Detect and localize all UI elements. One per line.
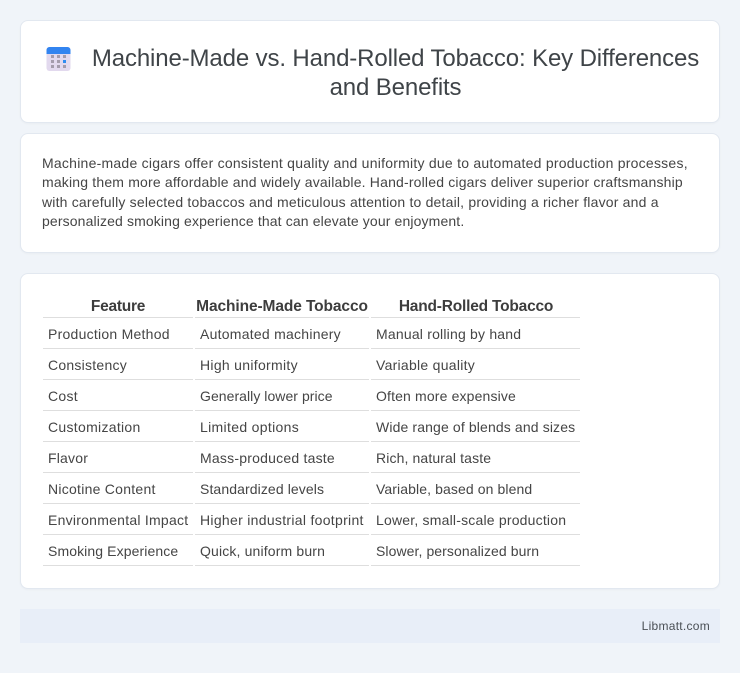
icon: calendar grid (46, 47, 70, 71)
row: production method: Production Method (48, 326, 170, 342)
footer bar (20, 609, 720, 643)
row: cost (48, 388, 516, 404)
row: consistency (48, 357, 475, 373)
row: consistency: High uniformity (200, 357, 298, 373)
row: environmental impact: Environmental Impact (48, 512, 188, 528)
row: cost: Cost (48, 388, 78, 404)
panel: title card (20, 20, 720, 123)
summary paragraph: Machine-made cigars offer consistent quality and uniformity due to automated production processes, (42, 154, 688, 170)
summary paragraph: with carefully selected tobaccos and meticulous attention to detail, providing a richer flavor and a (42, 194, 659, 210)
comparison table (43, 298, 580, 566)
row: consistency: Variable quality (376, 357, 475, 373)
summary paragraph: making them more affordable and widely available. Hand-rolled cigars deliver superior craftsmanship (42, 174, 683, 190)
footer credit: Libmatt.com (642, 619, 710, 633)
row: flavor: Flavor (48, 450, 88, 466)
row: production method: Automated machinery (200, 326, 341, 342)
title: Machine-Made vs. Hand-Rolled Tobacco: Key Differences and Benefits (92, 45, 699, 101)
table header: Feature (91, 298, 145, 315)
row: customization: Customization (48, 419, 141, 435)
summary paragraph (42, 154, 688, 229)
row: environmental impact: Lower, small-scale production (376, 512, 566, 528)
table header: Hand-Rolled Tobacco (399, 298, 553, 315)
row: nicotine content: Variable, based on blend (376, 481, 532, 497)
row: production method: Manual rolling by hand (376, 326, 521, 342)
row: nicotine content (48, 481, 532, 497)
row: smoking experience: Smoking Experience (48, 543, 178, 559)
row: smoking experience (48, 543, 539, 559)
row: production method (48, 326, 521, 342)
row: customization: Wide range of blends and sizes (376, 419, 575, 435)
row: customization (48, 419, 575, 435)
row: environmental impact: Higher industrial footprint (200, 512, 364, 528)
row: nicotine content: Nicotine Content (48, 481, 156, 497)
row: environmental impact (48, 512, 566, 528)
table header: Machine-Made Tobacco (196, 298, 368, 315)
row: flavor (48, 450, 491, 466)
row: nicotine content: Standardized levels (200, 481, 324, 497)
row: smoking experience: Slower, personalized burn (376, 543, 539, 559)
row: customization: Limited options (200, 419, 299, 435)
panel: comparison table (20, 273, 720, 589)
row: smoking experience: Quick, uniform burn (200, 543, 325, 559)
row: flavor: Rich, natural taste (376, 450, 491, 466)
row: cost: Generally lower price (200, 388, 333, 404)
panel: summary text (20, 133, 720, 253)
table header (91, 298, 553, 315)
row: flavor: Mass-produced taste (200, 450, 335, 466)
row: cost: Often more expensive (376, 388, 516, 404)
row: consistency: Consistency (48, 357, 127, 373)
summary paragraph: personalized smoking experience that can elevate your enjoyment. (42, 213, 464, 229)
